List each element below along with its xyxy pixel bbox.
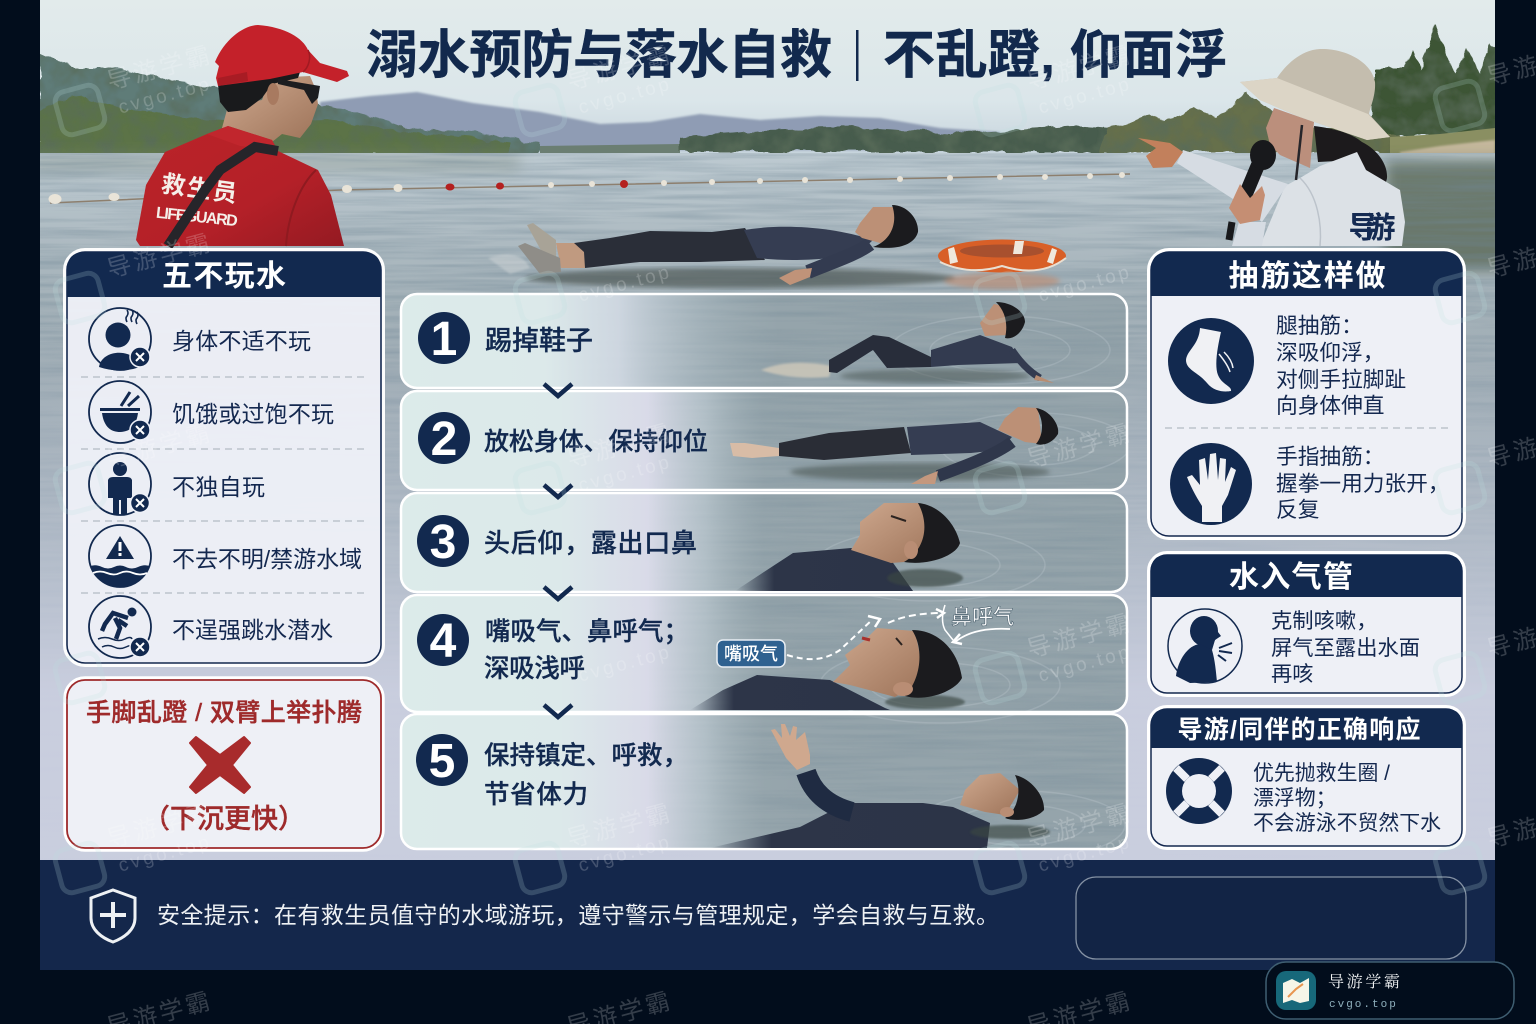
watermark grid: 导游学霸 (104, 229, 216, 283)
label: mouth inhale (717, 640, 785, 667)
step text 5: 节省体力 (484, 781, 588, 809)
watermark grid: cvgo.top (576, 831, 674, 877)
panel: step 4 (401, 595, 1127, 712)
title (366, 27, 1227, 85)
cramp finger text: 握拳一用力张开， (1276, 471, 1450, 496)
lavender veil (40, 300, 1495, 860)
heading: cramp: 抽筋这样做 (1228, 260, 1386, 293)
watermark grid: cvgo.top (576, 261, 674, 307)
label: nose exhale: 鼻呼气 (951, 606, 1014, 629)
watermark grid: cvgo.top (1036, 73, 1134, 119)
watermark grid: 导游学霸 (104, 799, 216, 853)
panel: step 5 (401, 714, 1127, 849)
cramp finger text: 手指抽筋： (1276, 444, 1384, 469)
watermark grid: 导游学霸 (564, 41, 676, 95)
watermark grid: 导游学霸 (1024, 41, 1136, 95)
step text 4: 深吸浅呼 (484, 655, 585, 683)
watermark grid: cvgo.top (1036, 831, 1134, 877)
response text: 不会游泳不贸然下水 (1253, 812, 1441, 835)
step number 4 (417, 614, 469, 668)
step text 3: 头后仰，露出口鼻 (484, 528, 697, 558)
panel: step 1 (401, 294, 1127, 388)
photo: step 5 arm up and float (710, 724, 1050, 848)
heading: guide response: 导游/同伴的正确响应 (1178, 715, 1420, 744)
response text: 漂浮物； (1253, 787, 1337, 810)
heading: water in airway: 水入气管 (1229, 561, 1353, 594)
label: mouth inhale: 嘴吸气 (724, 644, 778, 664)
watermark grid: 导游学霸 (564, 419, 676, 473)
photo: step 2 float (730, 407, 1058, 484)
step text 1: 踢掉鞋子 (485, 326, 593, 356)
panel: guide response (1149, 707, 1464, 848)
panel: step 2 (401, 391, 1127, 490)
watermark grid: cvgo.top (576, 73, 674, 119)
step text 4: 嘴吸气、鼻呼气； (485, 618, 689, 646)
cramp leg text (1276, 313, 1406, 418)
photo: step 1 float (761, 302, 1054, 383)
item text: 身体不适不玩 (172, 328, 311, 354)
water rings around floating heads (815, 316, 1130, 859)
brand name: 导游学霸 (1328, 969, 1400, 992)
cramp leg text: 向身体伸直 (1276, 393, 1384, 418)
cramp finger text: 反复 (1276, 497, 1319, 522)
warning text: 手脚乱蹬 / 双臂上举扑腾 (86, 699, 362, 727)
title: 不乱蹬, 仰面浮 (883, 27, 1227, 85)
tour guide figure (1138, 49, 1405, 246)
panel: step 3 (401, 493, 1127, 592)
step number 4: 4 (430, 615, 457, 668)
panel: water in airway (1149, 553, 1464, 695)
step text 5: 保持镇定、呼救， (484, 742, 688, 770)
response text: 优先抛救生圈 / (1253, 762, 1390, 785)
step number 2 (418, 412, 470, 466)
watermark grid: 导游学霸 (564, 799, 676, 853)
arrows: step chevrons (544, 384, 572, 717)
tour guide figure: 导游 (1348, 212, 1396, 245)
watermark grid: cvgo.top (1036, 261, 1134, 307)
watermark grid: 导游学霸 (1024, 799, 1136, 853)
watermark grid: cvgo.top (116, 831, 214, 877)
icon: coughing person (1168, 609, 1242, 683)
cramp leg text: 腿抽筋： (1276, 313, 1363, 338)
icon: map logo (1276, 971, 1316, 1010)
step number 1 (418, 312, 470, 366)
watermark grid: 导游学霸 (104, 419, 216, 473)
airway text: 再咳 (1271, 662, 1314, 686)
life buoy (938, 240, 1066, 289)
icon: hand (1170, 443, 1252, 525)
brand badge (1266, 962, 1514, 1019)
watermark grid: cvgo.top (116, 73, 214, 119)
icon: foot (1168, 318, 1254, 404)
breathing arrows (787, 605, 1010, 659)
airway text (1271, 609, 1420, 686)
icon: alone person (89, 453, 151, 515)
item text: 不独自玩 (172, 474, 265, 500)
icon: red cross (190, 737, 250, 793)
cramp leg text: 深吸仰浮， (1276, 340, 1384, 365)
brand url: cvgo.top (1329, 999, 1398, 1011)
panel: do not thrash warning (65, 678, 383, 850)
icon: unwell person (89, 308, 151, 370)
icon: safety shield (91, 890, 135, 942)
watermark grid: cvgo.top (576, 451, 674, 497)
water inside step panels (664, 295, 1126, 848)
icon: diving (89, 596, 151, 658)
step number 3 (417, 515, 469, 569)
cramp finger text (1276, 444, 1450, 522)
buoy line (48, 172, 1130, 204)
step text 2: 放松身体、保持仰位 (484, 428, 708, 456)
watermark grid: 导游学霸 (1024, 609, 1136, 663)
empty footer box (1076, 877, 1466, 959)
watermark grid: 导游学霸 (1024, 419, 1136, 473)
step number 3: 3 (430, 516, 456, 569)
warning result: （下沉更快） (143, 804, 305, 834)
title: 溺水预防与落水自救 (366, 27, 832, 85)
step text 5 (484, 742, 688, 809)
item text: 不去不明/禁游水域 (172, 546, 362, 572)
heading: five do-nots: 五不玩水 (162, 260, 286, 293)
floating man (488, 205, 1066, 289)
safety tip text: 安全提示：在有救生员值守的水域游玩，遵守警示与管理规定，学会自救与互救。 (157, 902, 999, 928)
panel: five do-nots (65, 250, 383, 665)
lifeguard figure: LIFEGUARD (155, 205, 239, 230)
photo: step 4 float (690, 628, 965, 710)
lifeguard figure: 救生员 (160, 171, 241, 208)
panel: cramp (1149, 250, 1464, 538)
icon: danger water (89, 525, 151, 587)
step text 4 (484, 618, 689, 683)
cramp leg text: 对侧手拉脚趾 (1276, 367, 1406, 392)
airway text: 克制咳嗽， (1271, 609, 1378, 633)
photo: step 3 float (735, 503, 963, 591)
watermark grid: cvgo.top (1036, 641, 1134, 687)
icon: bowl (89, 381, 151, 443)
watermark grid: 导游学霸 (104, 41, 216, 95)
lifeguard figure (136, 25, 349, 246)
footer bar (40, 860, 1495, 970)
watermark grid: cvgo.top (576, 641, 674, 687)
airway text: 屏气至露出水面 (1271, 636, 1420, 660)
step number 5 (416, 734, 468, 788)
step number 5: 5 (429, 735, 455, 788)
item text: 不逞强跳水潜水 (172, 617, 333, 643)
response text (1253, 762, 1441, 835)
item text: 饥饿或过饱不玩 (172, 401, 334, 427)
step number 2: 2 (431, 413, 457, 466)
icon: life ring (1166, 758, 1232, 824)
step number 1: 1 (431, 313, 457, 366)
